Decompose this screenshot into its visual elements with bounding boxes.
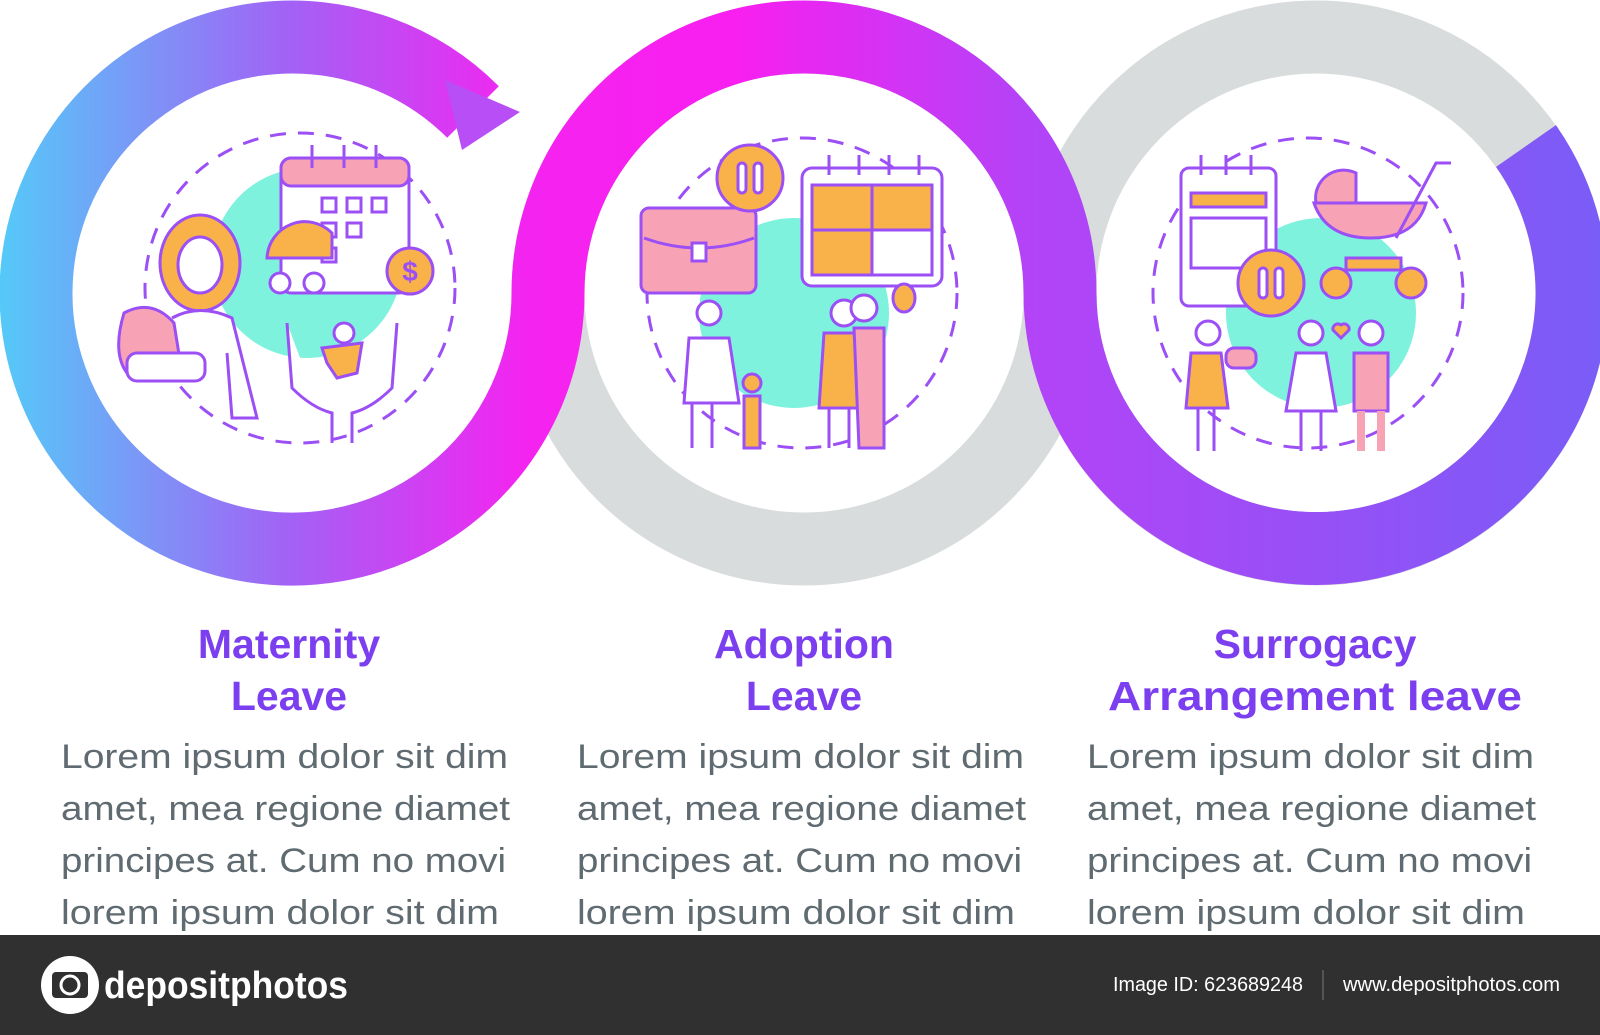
panel: maternity leave icon: $ [402, 256, 418, 287]
text block: adoption [577, 738, 1027, 932]
footer bar [0, 935, 1600, 1035]
text block: surrogacy: Lorem ipsum dolor sit dim [1087, 738, 1534, 776]
title: surrogacy arrangement leave: Arrangement leave [1108, 673, 1522, 719]
panel: surrogacy leave icon [1097, 74, 1535, 512]
text block: surrogacy: principes at. Cum no movi [1087, 842, 1532, 880]
text block: maternity: amet, mea regione diamet [61, 790, 511, 828]
icon: briefcase with pause [641, 145, 783, 293]
title: surrogacy arrangement leave: Surrogacy [1214, 621, 1417, 667]
icon: calendar with pause [1181, 155, 1304, 316]
title: maternity leave: Leave [231, 673, 347, 719]
footer bar: Image ID: 623689248 [1113, 974, 1303, 996]
colored wave band [36, 37, 1572, 549]
text block: surrogacy: amet, mea regione diamet [1087, 790, 1537, 828]
icon: hands with child [287, 323, 397, 443]
icon: family figures [684, 284, 915, 448]
grey rings [548, 37, 1572, 549]
title: adoption leave [714, 621, 894, 719]
title: maternity leave [198, 621, 380, 719]
footer bar: www.depositphotos.com [1342, 974, 1560, 996]
title: adoption leave: Leave [746, 673, 862, 719]
text block: surrogacy [1087, 738, 1537, 932]
text block: adoption: lorem ipsum dolor sit dim [577, 894, 1015, 932]
title: maternity leave: Maternity [198, 621, 380, 667]
text block: adoption: Lorem ipsum dolor sit dim [577, 738, 1024, 776]
text block: adoption: principes at. Cum no movi [577, 842, 1022, 880]
title: adoption leave: Adoption [714, 621, 894, 667]
text block: maternity: principes at. Cum no movi [61, 842, 506, 880]
icon: camera logo [41, 956, 99, 1014]
panel: adoption leave icon [585, 74, 1023, 512]
title: surrogacy arrangement leave [1108, 621, 1522, 719]
icon: stroller [1314, 163, 1451, 298]
icon: calendar [267, 145, 433, 294]
text block: maternity: Lorem ipsum dolor sit dim [61, 738, 508, 776]
panel: maternity leave icon [73, 74, 511, 512]
text block: maternity: lorem ipsum dolor sit dim [61, 894, 499, 932]
text block: maternity [61, 738, 511, 932]
footer bar: depositphotos [104, 965, 348, 1007]
icon: surrogate and couple [1186, 321, 1388, 451]
text block: adoption: amet, mea regione diamet [577, 790, 1027, 828]
text block: surrogacy: lorem ipsum dolor sit dim [1087, 894, 1525, 932]
icon: mother with baby [119, 215, 257, 418]
icon: calendar with checks [802, 155, 942, 286]
